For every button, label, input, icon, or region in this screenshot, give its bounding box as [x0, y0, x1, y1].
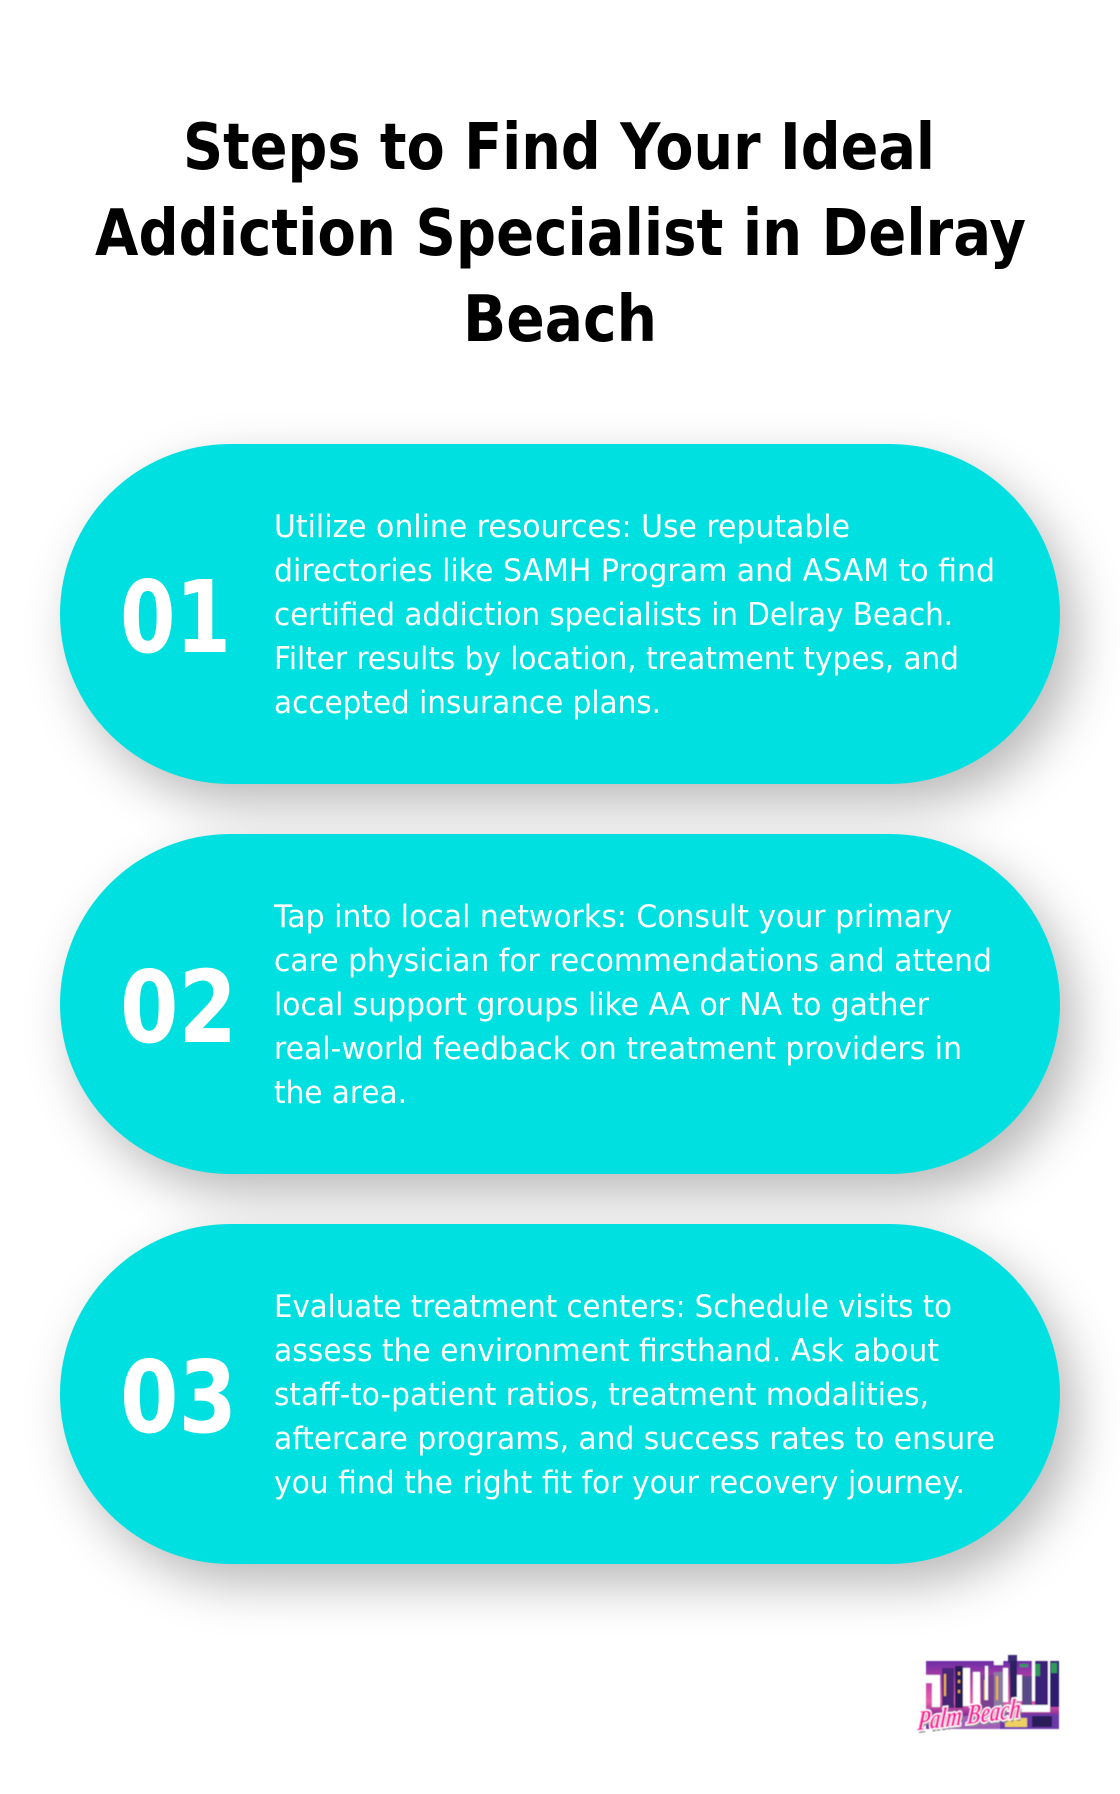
step number 02: 02: [120, 949, 237, 1066]
text block: step 2 description: [273, 899, 992, 1111]
text block: step 2 description: real-world feedback on treatment providers in: [274, 1031, 962, 1067]
text block: step 3 description: staff-to-patient ratios, treatment modalities,: [274, 1377, 929, 1413]
text block: step 2 description: local support groups like AA or NA to gather: [274, 987, 929, 1023]
panel: step 3: [60, 1224, 1060, 1564]
text block: step 2 description: the area.: [274, 1075, 407, 1111]
step number 03: 03: [120, 1339, 237, 1456]
text block: step 3 description: [274, 1289, 995, 1501]
text block: step 1 description: certified addiction specialists in Delray Beach.: [274, 597, 953, 633]
text block: step 1 description: Filter results by location, treatment types, and: [274, 641, 959, 677]
title: Beach: [463, 283, 657, 357]
script text: Palm Beach: Palm Beach: [916, 1693, 1022, 1737]
text block: step 1 description: accepted insurance plans.: [274, 685, 661, 721]
water reflection: [1000, 1714, 1059, 1729]
palm fronds: [1020, 1663, 1057, 1676]
text block: step 3 description: aftercare programs, and success rates to ensure: [274, 1421, 995, 1457]
logo image band: [926, 1661, 1059, 1729]
text block: step 3 description: you find the right fit for your recovery journey.: [274, 1465, 965, 1501]
panel: step 1: [60, 444, 1060, 784]
title: Steps to Find Your Ideal: [183, 111, 935, 185]
text block: step 2 description: Tap into local networks: Consult your primary: [273, 899, 952, 935]
panel: step 2: [60, 834, 1060, 1174]
building window lights: [944, 1672, 998, 1700]
title: [95, 111, 1026, 357]
script text: Palm Beach: Palm Beach: [917, 1696, 1024, 1740]
step number 01: 01: [120, 559, 231, 676]
text block: step 1 description: directories like SAMH Program and ASAM to find: [274, 553, 995, 589]
text block: step 3 description: Evaluate treatment centers: Schedule visits to: [274, 1289, 952, 1325]
text block: step 2 description: care physician for recommendations and attend: [274, 943, 992, 979]
text block: step 1 description: [274, 509, 995, 721]
text block: step 3 description: assess the environment firsthand. Ask about: [274, 1333, 939, 1369]
text block: step 1 description: Utilize online resources: Use reputable: [274, 509, 850, 545]
white letter cuts: [926, 1655, 1050, 1712]
city buildings: [942, 1668, 954, 1708]
